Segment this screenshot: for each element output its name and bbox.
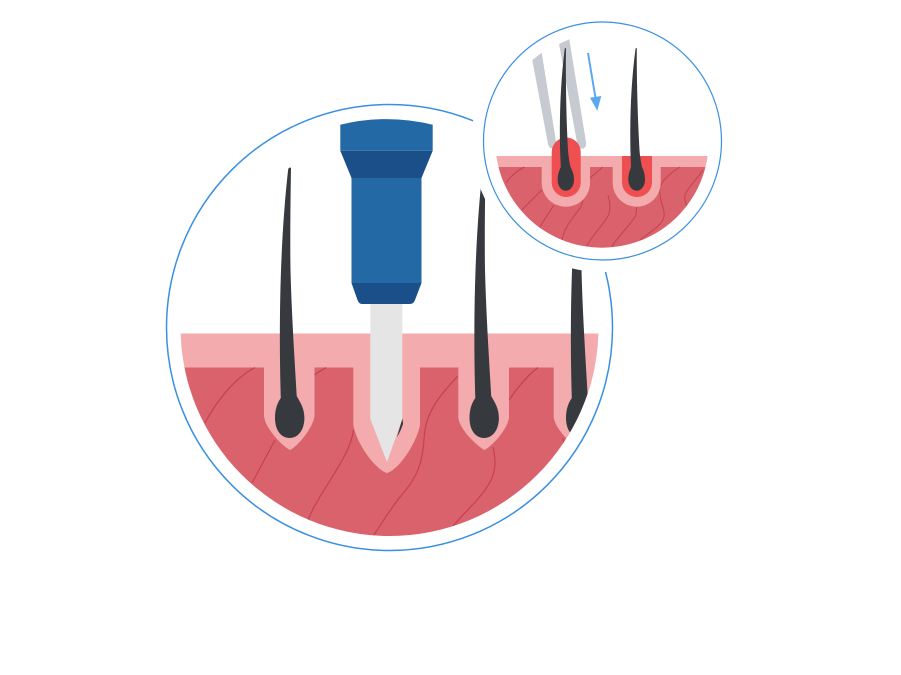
hair 3 xyxy=(470,167,499,438)
small hair 1 xyxy=(558,48,574,191)
second follicle red sheath xyxy=(622,156,652,197)
illustration: hair removal diagram xyxy=(166,21,722,552)
follicle 1 xyxy=(264,368,314,450)
follicle 4 xyxy=(554,368,594,438)
hair 4 xyxy=(566,268,588,432)
small circle outline xyxy=(484,22,722,260)
small circle white backing xyxy=(472,10,734,272)
tool: blue handle xyxy=(340,119,433,304)
panel: large skin cross-section xyxy=(170,334,610,542)
extracted follicle red sheath xyxy=(552,138,581,197)
arrow pointing down xyxy=(588,53,601,111)
hair 1 xyxy=(275,167,304,438)
hair sliver behind needle xyxy=(397,418,403,437)
large circle outline xyxy=(166,104,612,550)
small follicle 2 xyxy=(613,167,661,207)
small hair 2 xyxy=(628,48,645,191)
needle xyxy=(370,300,402,462)
follicle 3 xyxy=(458,368,509,450)
panel: small skin cross-section xyxy=(490,156,715,252)
tweezers xyxy=(532,39,586,149)
small follicle 1 xyxy=(542,167,590,207)
follicle 2 xyxy=(353,368,420,473)
